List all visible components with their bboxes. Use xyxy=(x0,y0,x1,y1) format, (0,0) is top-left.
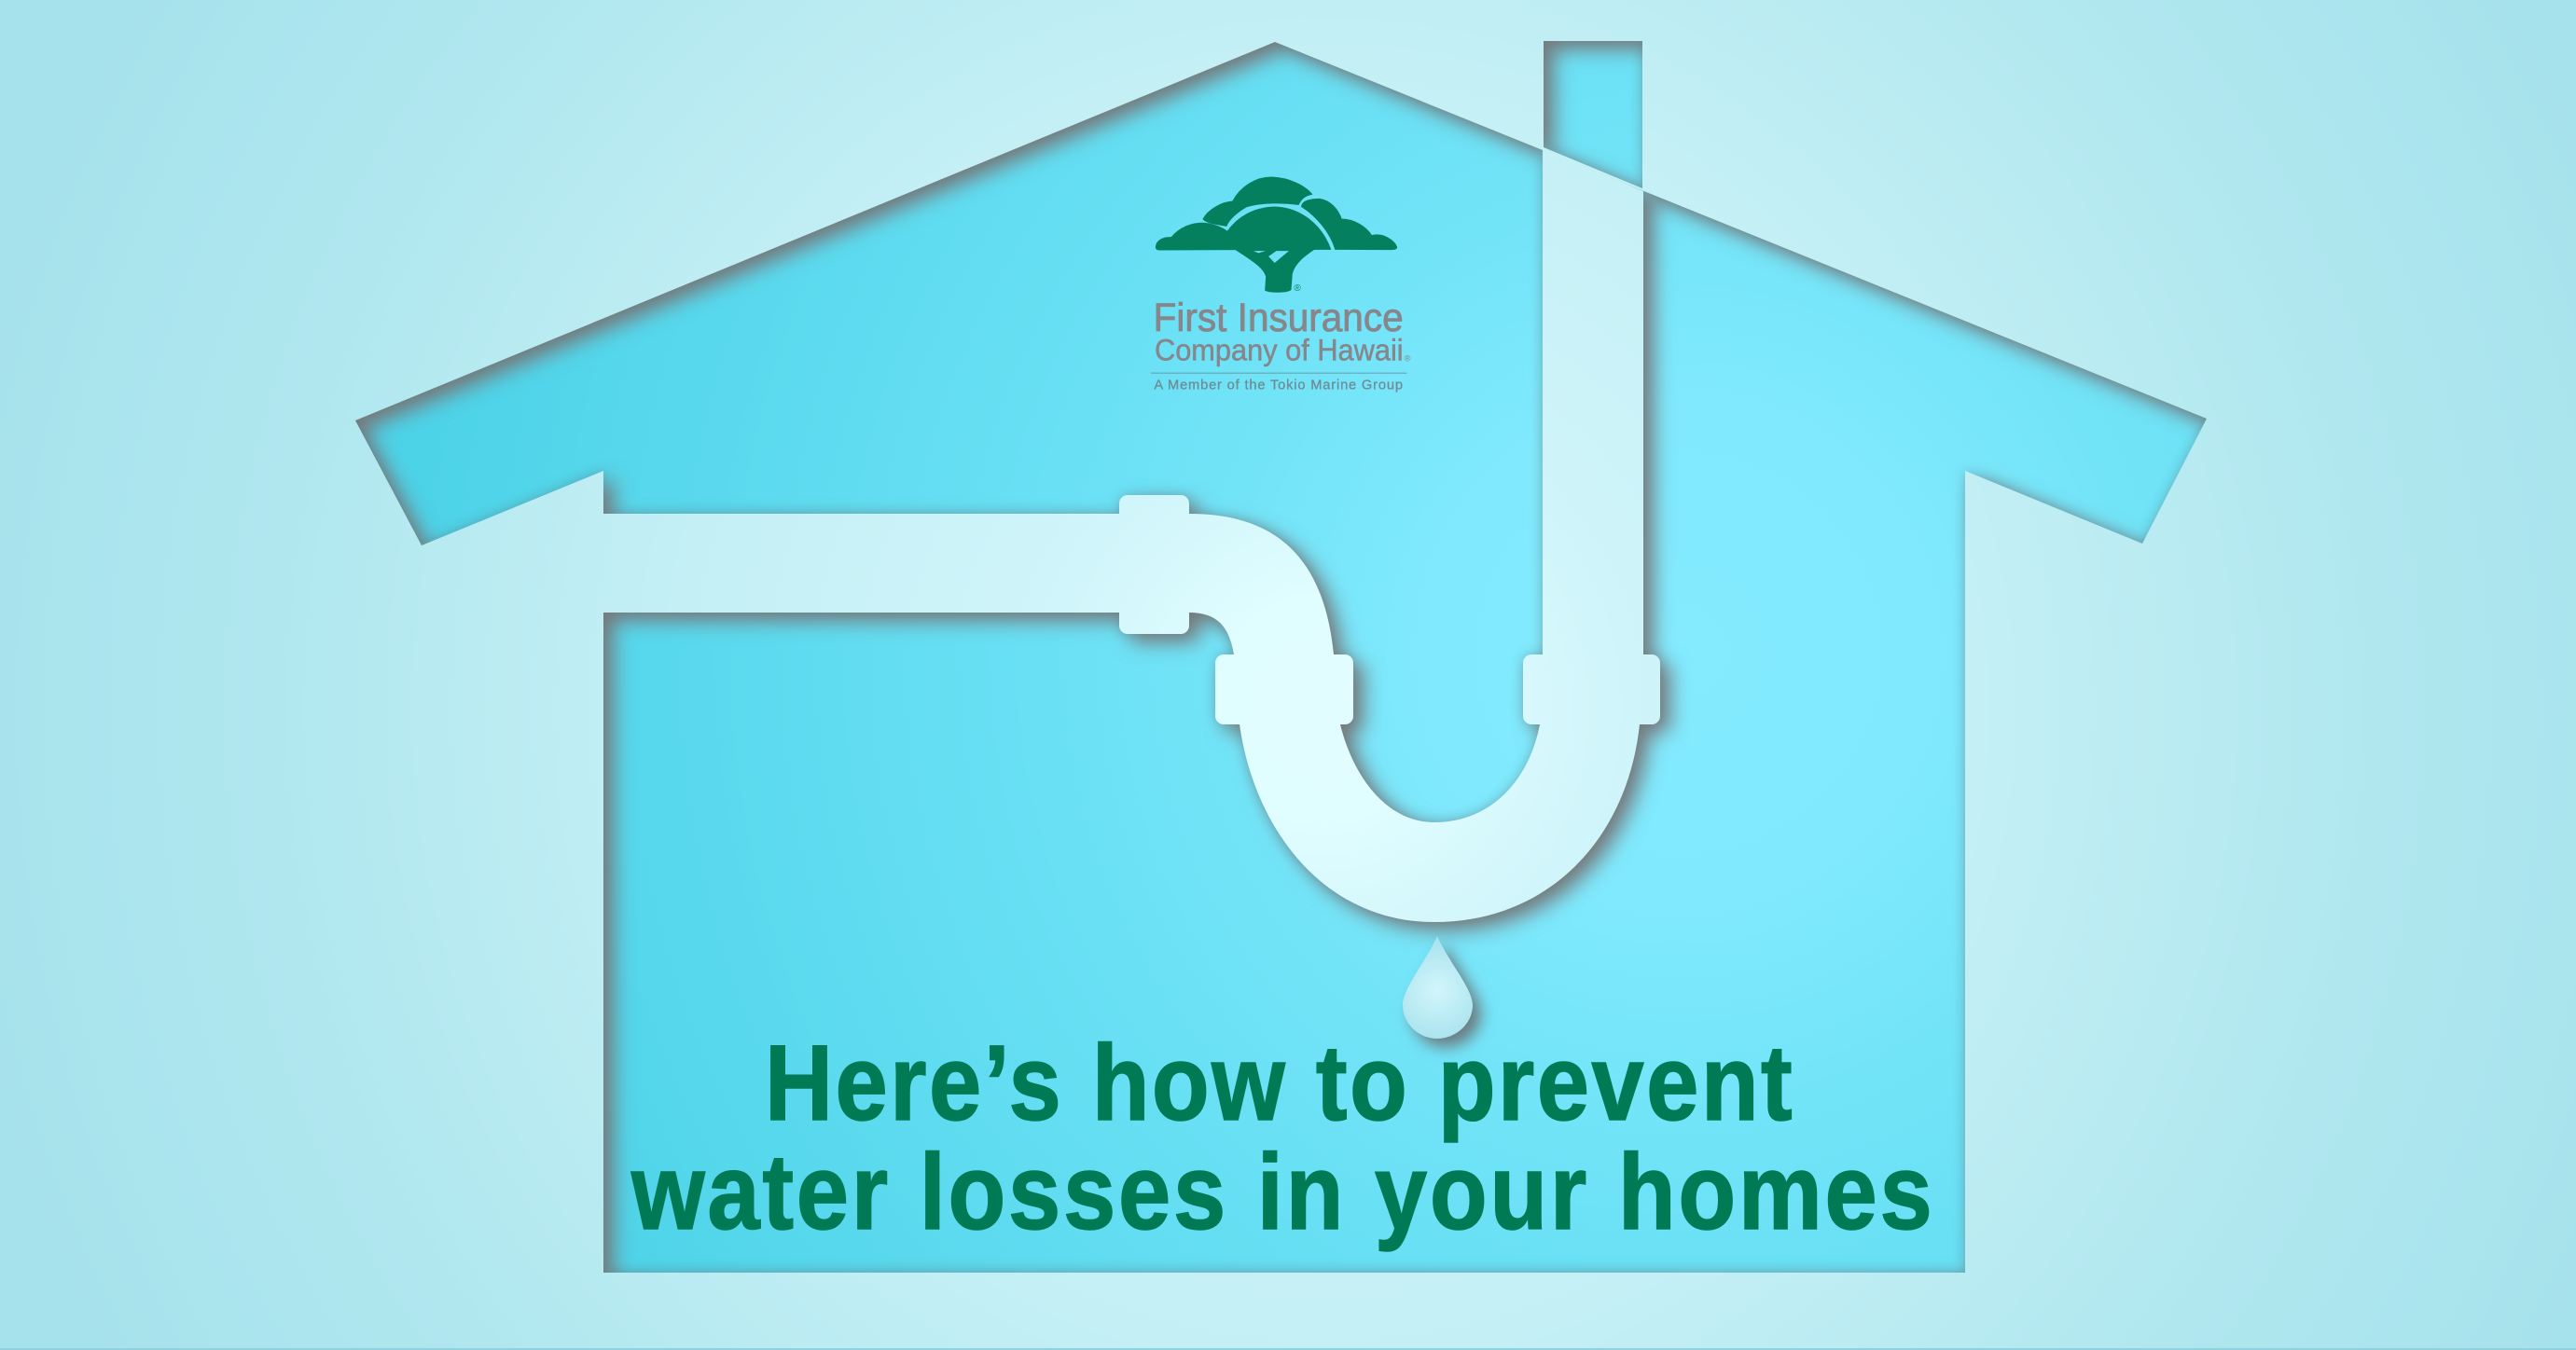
white pipe xyxy=(560,149,1660,922)
coupling: horizontal pipe xyxy=(1119,495,1189,634)
bottom edge line xyxy=(0,1348,2576,1350)
company name line 2: Company of Hawaii xyxy=(1155,334,1404,367)
company name line 1: First Insurance xyxy=(1154,296,1404,340)
coupling: left of trap xyxy=(1215,654,1353,724)
tagline: A Member of the Tokio Marine Group xyxy=(1154,378,1403,393)
coupling: right of trap xyxy=(1523,654,1660,724)
heading xyxy=(630,1023,1932,1251)
registered mark small: ® xyxy=(1405,353,1411,363)
horizontal pipe xyxy=(560,514,1189,613)
icon: tree xyxy=(1156,177,1397,292)
heading line 1: Here’s how to prevent xyxy=(765,1023,1793,1142)
heading line 2: water losses in your homes xyxy=(630,1132,1932,1251)
logo divider xyxy=(1151,373,1406,374)
logo: First Insurance Company of Hawaii xyxy=(1151,177,1411,393)
icon: water drop xyxy=(1403,936,1473,1039)
upper elbow xyxy=(1184,514,1334,671)
registered mark: ® xyxy=(1294,283,1301,294)
U-bend xyxy=(1240,718,1640,922)
vertical pipe through the roof xyxy=(1543,149,1643,671)
